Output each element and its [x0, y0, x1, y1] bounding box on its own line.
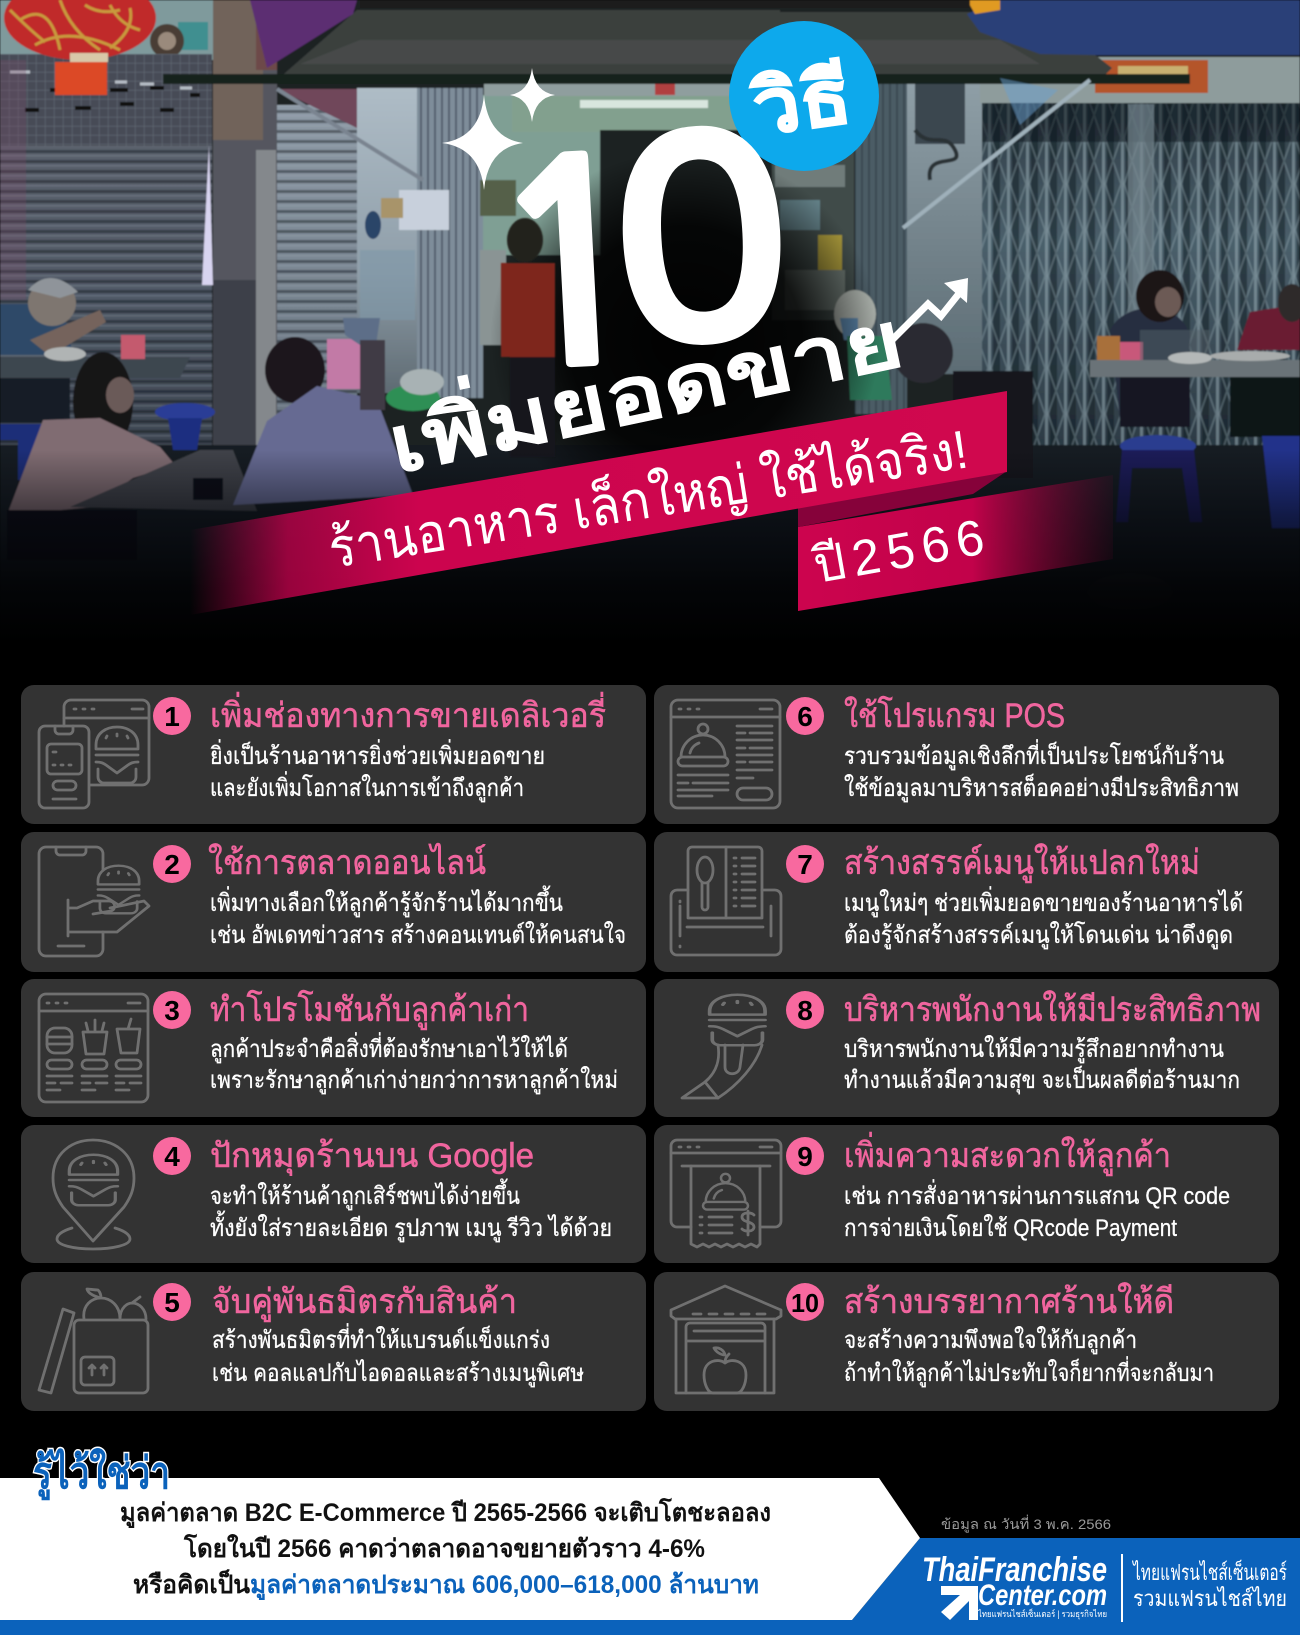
title 10: สร้างบรรยากาศร้านให้ดี [844, 1282, 1174, 1321]
icon: menu tablet [671, 847, 781, 955]
description 10: จะสร้างความพึงพอใจให้กับลูกค้า [844, 1326, 1137, 1355]
bubble: วิธี: วิธี [746, 54, 856, 152]
title 5: จับคู่พันธมิตรกับสินค้า [212, 1283, 517, 1322]
photo old woman and fan [834, 290, 876, 338]
icon: map pin [53, 1140, 134, 1249]
fact line 3: มูลค่าตลาดประมาณ 606,000–618,000 ล้านบาท [250, 1571, 759, 1601]
photo right woman [1110, 308, 1190, 420]
big number 10: 0 [601, 101, 802, 388]
big number 10: 1 [479, 125, 663, 411]
icon: grocery bag [39, 1289, 148, 1393]
big number 10 [479, 101, 802, 411]
photo green basin [386, 385, 440, 411]
icon: hand holding burger [682, 995, 765, 1098]
number 10: 10 [791, 1288, 819, 1318]
title 7: สร้างสรรค์เมนูให้แปลกใหม่ [844, 843, 1200, 883]
panel: tip 6 [654, 685, 1279, 824]
panel: tip 2 [21, 832, 646, 972]
panel: tip 3 [21, 979, 646, 1117]
icon: promotion menu [39, 994, 148, 1102]
photo ground [0, 445, 1300, 690]
number 4 [153, 1137, 191, 1175]
title 6: ใช้โปรแกรม POS [844, 696, 1065, 735]
number 4: 4 [164, 1141, 180, 1172]
ribbon: year [798, 471, 1113, 611]
description 2: เพิ่มทางเลือกให้ลูกค้ารู้จักร้านได้มากขึ้น [210, 885, 563, 918]
bubble: วิธี [729, 21, 879, 171]
number 2 [153, 845, 191, 883]
number 1: 1 [164, 701, 180, 732]
photo right wall [855, 84, 907, 414]
icon: delivery app [39, 700, 149, 808]
icon: online marketing [39, 847, 149, 956]
number 8 [786, 991, 824, 1029]
icon: receipt payment [671, 1140, 781, 1247]
description 9: เช่น การสั่งอาหารผ่านการแสกน QR code [844, 1179, 1230, 1210]
headline: เพิ่มยอดขาย: เพิ่มยอดขาย [379, 284, 910, 490]
description 10: ถ้าทำให้ลูกค้าไม่ประทับใจก็ยากที่จะกลับมา [844, 1356, 1214, 1388]
panel: tip 4 [21, 1125, 646, 1263]
panel: tip 7 [654, 832, 1279, 972]
photo blue stools left [155, 403, 215, 421]
fact heading: รู้ไว้ใช่ว่า [33, 1447, 170, 1500]
description 9 [844, 1179, 1230, 1242]
description 3: เพราะรักษาลูกค้าเก่าง่ายกว่าการหาลูกค้าใหม่ [210, 1066, 618, 1095]
number 6: 6 [797, 701, 813, 732]
photo shop interior [484, 83, 739, 96]
ribbon: subtitle [190, 391, 1007, 615]
photo white wall and metal door [357, 88, 417, 393]
hero photo: street food shop at night [0, 0, 1300, 694]
description 2: เช่น อัพเดทข่าวสาร สร้างคอนเทนต์ให้คนสนใจ [210, 921, 626, 949]
panel: tip 5 [21, 1272, 646, 1411]
number 8: 8 [797, 995, 813, 1026]
description 7 [844, 886, 1243, 950]
icon: sparkles [442, 68, 555, 190]
panel: tip 8 [654, 979, 1279, 1117]
description 7: ต้องรู้จักสร้างสรรค์เมนูให้โดนเด่น น่าดึงดูด [844, 921, 1233, 950]
description 1: ยิ่งเป็นร้านอาหารยิ่งช่วยเพิ่มยอดขาย [210, 739, 545, 770]
description 6: ใช้ข้อมูลมาบริหารสต็อคอย่างมีประสิทธิภาพ [844, 773, 1239, 803]
number 9: 9 [797, 1141, 813, 1172]
number 5: 5 [164, 1287, 180, 1318]
logo: ThaiFranchise Center: ThaiFranchise [922, 1551, 1107, 1589]
number 2: 2 [164, 849, 180, 880]
fact line 1: มูลค่าตลาด B2C E-Commerce ปี 2565-2566 จะเติบโตชะลอลง [120, 1497, 771, 1529]
photo man eating left [0, 304, 73, 355]
title 2: ใช้การตลาดออนไลน์ [208, 843, 486, 882]
photo awning [277, 10, 1112, 80]
arrow: rising sales [890, 278, 968, 342]
number 1 [153, 697, 191, 735]
photo back wall left [0, 0, 215, 60]
description 9: การจ่ายเงินโดยใช้ QRcode Payment [844, 1214, 1177, 1242]
description 5: เช่น คอลแลปกับไอดอลและสร้างเมนูพิเศษ [212, 1359, 584, 1388]
description 8 [844, 1035, 1240, 1095]
description 4 [210, 1178, 612, 1243]
description 6: รวบรวมข้อมูลเชิงลึกที่เป็นประโยชน์กับร้าน [844, 739, 1224, 771]
description 1: และยังเพิ่มโอกาสในการเข้าถึงลูกค้า [210, 771, 524, 803]
number 10 [786, 1283, 824, 1321]
description 3 [210, 1032, 618, 1095]
panel: tip 9 [654, 1125, 1279, 1263]
ribbon text: ปี2566: ปี2566 [808, 509, 988, 594]
icon: shop with apple [671, 1286, 781, 1393]
data date note: ข้อมูล ณ วันที่ 3 พ.ค. 2566 [941, 1515, 1111, 1533]
number 7: 7 [797, 849, 813, 880]
description 4: ทั้งยังใส่รายละเอียด รูปภาพ เมนู รีวิว ได้ด้วย [210, 1210, 612, 1243]
description 10 [844, 1326, 1214, 1388]
description 1 [210, 739, 545, 803]
number 3 [153, 991, 191, 1029]
ribbon text: small and large restaurants: ร้านอาหาร เล็กใหญ่ ใช้ได้จริง! [324, 418, 972, 580]
number 7 [786, 845, 824, 883]
title 1: เพิ่มช่องทางการขายเดลิเวอรี่ [210, 692, 606, 735]
footer: white fact panel [0, 1447, 920, 1620]
description 4: จะทำให้ร้านค้าถูกเสิร์ชพบได้ง่ายขึ้น [210, 1178, 520, 1211]
title 3: ทำโปรโมชันกับลูกค้าเก่า [210, 990, 529, 1030]
number 9 [786, 1137, 824, 1175]
description 6 [844, 739, 1239, 803]
icon: POS window [671, 700, 780, 808]
logo: ThaiFranchise Center: Center.com [978, 1579, 1107, 1612]
photo second shutter [277, 105, 357, 445]
title 4: ปักหมุดร้านบน Google [210, 1137, 534, 1176]
description 5: สร้างพันธมิตรที่ทำให้แบรนด์แข็งแกร่ง [212, 1323, 550, 1354]
description 8: บริหารพนักงานให้มีความรู้สึกอยากทำงาน [844, 1035, 1224, 1064]
description 2 [210, 885, 626, 949]
description 8: ทำงานแล้วมีความสุข จะเป็นผลดีต่อร้านมาก [844, 1065, 1240, 1095]
photo table [70, 450, 257, 511]
photo man in red shirt [501, 218, 555, 457]
photo woman with phone [73, 352, 133, 452]
photo folding gate [982, 102, 1300, 454]
photo pillar [213, 0, 277, 445]
number 6 [786, 697, 824, 735]
panel: tip 1 [21, 685, 646, 824]
panel: tip 10 [654, 1272, 1279, 1411]
description 7: เมนูใหม่ๆ ช่วยเพิ่มยอดขายของร้านอาหารได้ [844, 886, 1243, 918]
footer: blue band [0, 1538, 1300, 1635]
description 3: ลูกค้าประจำคือสิ่งที่ต้องรักษาเอาไว้ให้ได้ [210, 1032, 568, 1064]
photo lantern [4, 0, 156, 60]
description 5 [212, 1323, 584, 1388]
fact line 2: โดยในปี 2566 คาดว่าตลาดอาจขยายตัวราว 4-6% [183, 1533, 705, 1563]
logo: ThaiFranchise Center: ไทยแฟรนไชส์เซ็นเตอร์ | รวมธุรกิจไทย [977, 1607, 1107, 1620]
title 9: เพิ่มความสะดวกให้ลูกค้า [844, 1132, 1171, 1176]
photo man in red right [1237, 304, 1300, 350]
number 5 [153, 1283, 191, 1321]
photo right table [1090, 360, 1300, 377]
photo man with back to camera [265, 337, 325, 403]
fact line 3 [133, 1569, 759, 1601]
photo right stools [1120, 435, 1196, 457]
fact line 3: หรือคิดเป็น [133, 1569, 250, 1599]
logo: ThaiFranchise Center [922, 1551, 1287, 1622]
number 3: 3 [164, 995, 180, 1026]
